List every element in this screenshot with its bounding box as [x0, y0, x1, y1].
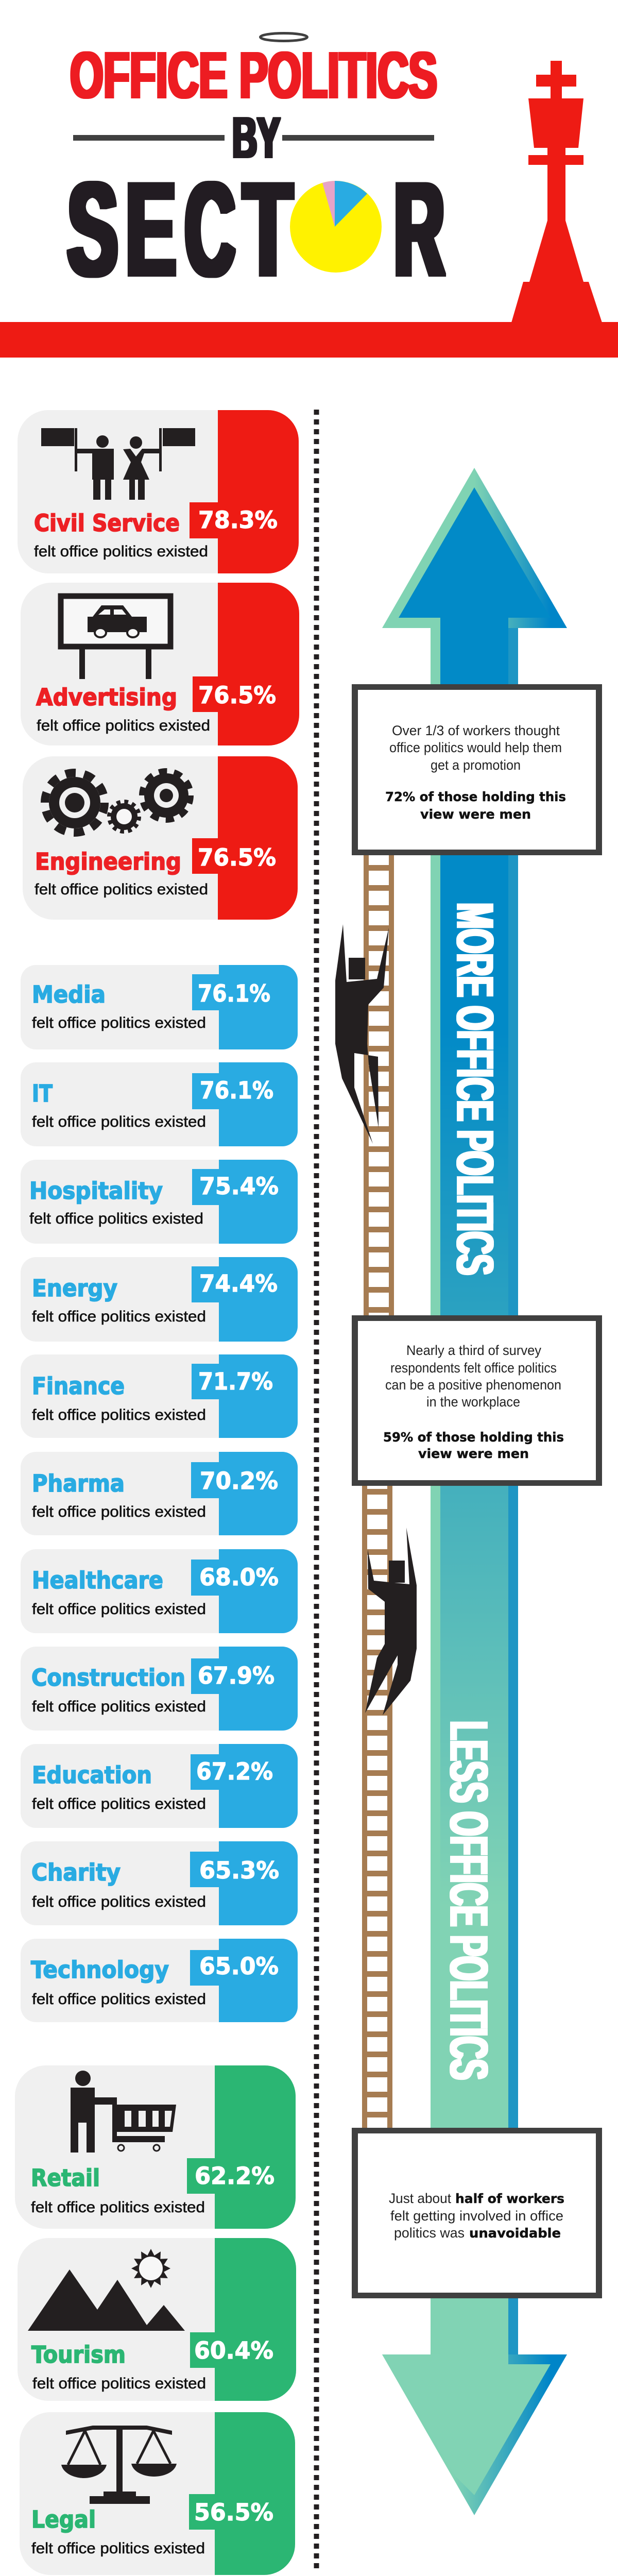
title: office politics: OFFICE POLITICS [70, 39, 437, 111]
panel: pharma [21, 1452, 298, 1535]
sector name: Energy [32, 1275, 117, 1302]
sector name: Civil Service [34, 510, 180, 537]
callout: unavoidable: felt getting involved in office [390, 2208, 563, 2224]
callout: positive phenomenon: can be a positive phenomenon [385, 1377, 561, 1393]
ladder: lower [362, 1469, 392, 2131]
callout: unavoidable: Just about [389, 2191, 451, 2206]
sector name: Retail [31, 2164, 100, 2192]
panel: charity [21, 1841, 298, 1925]
callout: promotion: 72% of those holding this [385, 789, 566, 804]
callout: positive phenomenon: view were men [418, 1446, 529, 1461]
caption: felt office politics existed [32, 2375, 206, 2392]
sector name: Advertising [36, 684, 177, 711]
title: sector: R [394, 155, 444, 303]
callout: promotion: Over 1/3 of workers thought [392, 723, 560, 738]
caption: felt office politics existed [32, 1893, 206, 1910]
up arrow head [382, 468, 567, 628]
caption: felt office politics existed [32, 1113, 206, 1130]
caption: felt office politics existed [35, 881, 208, 898]
title: sector: T [243, 155, 293, 303]
sector name: Engineering [35, 848, 181, 875]
caption: felt office politics existed [34, 543, 208, 560]
percentage: 68.0% [199, 1564, 279, 1591]
title: sector [67, 155, 444, 303]
icon: climber lower [365, 1528, 417, 1715]
sector name: Media [32, 981, 106, 1008]
panel: retail [15, 2065, 296, 2229]
callout: promotion: office politics would help them [389, 740, 562, 755]
callout: unavoidable: half of workers [455, 2191, 564, 2206]
panel: construction [21, 1647, 298, 1731]
caption: felt office politics existed [32, 1601, 206, 1618]
sector name: Education [32, 1761, 152, 1789]
sector name: Charity [31, 1859, 121, 1886]
callout: positive phenomenon: 59% of those holding this [383, 1430, 564, 1445]
callout: positive phenomenon: Nearly a third of survey [406, 1343, 541, 1358]
panel: education [21, 1744, 298, 1828]
panel: civil service [18, 410, 299, 573]
caption: felt office politics existed [29, 1210, 203, 1227]
down arrow head [382, 2354, 567, 2515]
panel: finance [21, 1354, 298, 1438]
caption: felt office politics existed [32, 1503, 206, 1520]
callout: unavoidable: unavoidable [469, 2226, 561, 2241]
label: more office politics: MORE OFFICE POLITICS [446, 903, 504, 1275]
panel: legal [20, 2412, 295, 2575]
icon: climber upper head [349, 958, 365, 979]
left shaft edge [431, 623, 440, 2360]
sector name: Legal [31, 2506, 96, 2533]
sector name: Healthcare [32, 1567, 163, 1594]
icon: climber upper [335, 924, 389, 1144]
percentage: 74.4% [199, 1270, 278, 1297]
percentage: 65.3% [199, 1857, 279, 1884]
title: by: BY [232, 106, 280, 170]
ladder: upper [364, 845, 394, 1319]
panel: healthcare [21, 1549, 298, 1633]
up head inner [399, 487, 551, 618]
percentage: 76.5% [198, 682, 276, 709]
percentage: 78.3% [198, 506, 278, 534]
percentage: 76.1% [198, 980, 270, 1007]
icon: person with shopping trolley [71, 2071, 176, 2153]
icon: halo [261, 33, 307, 41]
sector name: Finance [32, 1372, 125, 1400]
percentage: 62.2% [195, 2162, 274, 2190]
title: sector: S [67, 155, 118, 303]
callout: positive phenomenon [352, 1315, 602, 1486]
caption: felt office politics existed [32, 1014, 206, 1031]
icon: climber lower head [389, 1561, 405, 1583]
callout: unavoidable: politics was [394, 2225, 465, 2241]
icon: gears [45, 771, 191, 833]
rule right of BY [282, 135, 434, 141]
percentage: 56.5% [194, 2499, 273, 2526]
percentage: 67.9% [198, 1662, 274, 1689]
sector name: Tourism [31, 2341, 126, 2368]
icon: two people with flags [41, 428, 195, 500]
percentage: 65.0% [199, 1953, 279, 1980]
down head inner [382, 2354, 551, 2495]
panel: tourism [18, 2238, 296, 2401]
title: sector: E [126, 155, 176, 303]
panel: engineering [23, 756, 298, 920]
sector name: Construction [31, 1664, 185, 1691]
label: less office politics: LESS OFFICE POLITICS [439, 1721, 499, 2080]
percentage: 67.2% [196, 1758, 273, 1785]
callout: promotion: get a promotion [431, 757, 521, 773]
icon: scales of justice [61, 2426, 177, 2504]
percentage: 76.5% [198, 844, 276, 871]
sector name: Pharma [32, 1470, 125, 1497]
percentage: 76.1% [200, 1077, 273, 1104]
callout: positive phenomenon: in the workplace [426, 1394, 520, 1410]
callout: unavoidable [352, 2128, 602, 2298]
arrow: more and less office politics [382, 468, 567, 2515]
caption: felt office politics existed [32, 1991, 206, 2008]
right shaft edge [508, 628, 518, 2354]
red ground band [0, 322, 618, 358]
panel: hospitality [21, 1160, 298, 1244]
shaft centre [440, 618, 508, 2364]
percentage: 60.4% [194, 2337, 273, 2364]
caption: felt office politics existed [37, 717, 210, 734]
icon: mountains and sun [28, 2249, 185, 2331]
panel: advertising [21, 583, 299, 745]
callout: promotion [352, 684, 602, 855]
callout: promotion: view were men [420, 807, 531, 822]
icon: billboard with car [61, 596, 170, 679]
percentage: 71.7% [198, 1368, 273, 1395]
caption: felt office politics existed [32, 1308, 206, 1325]
icon: chess king [511, 61, 602, 323]
panel: energy [21, 1257, 298, 1342]
panel: technology [21, 1939, 298, 2022]
panel: media [21, 965, 298, 1049]
title: sector: O [304, 185, 366, 278]
chart: pie replacing the letter O [290, 181, 382, 273]
percentage: 70.2% [200, 1467, 278, 1495]
panel: IT [21, 1062, 298, 1146]
caption: felt office politics existed [32, 1698, 206, 1715]
dotted divider [314, 410, 319, 2569]
sector name: Technology [31, 1956, 169, 1984]
sector name: Hospitality [29, 1177, 163, 1205]
caption: felt office politics existed [32, 1795, 206, 1812]
percentage: 75.4% [199, 1173, 279, 1200]
rule left of BY [73, 135, 225, 141]
header: title and chess king [0, 33, 618, 358]
caption: felt office politics existed [31, 2199, 205, 2216]
sector name: IT [32, 1080, 53, 1107]
title: sector: C [185, 155, 235, 303]
caption: felt office politics existed [31, 2540, 205, 2557]
caption: felt office politics existed [32, 1406, 206, 1423]
callout: positive phenomenon: respondents felt office politics [390, 1360, 557, 1376]
